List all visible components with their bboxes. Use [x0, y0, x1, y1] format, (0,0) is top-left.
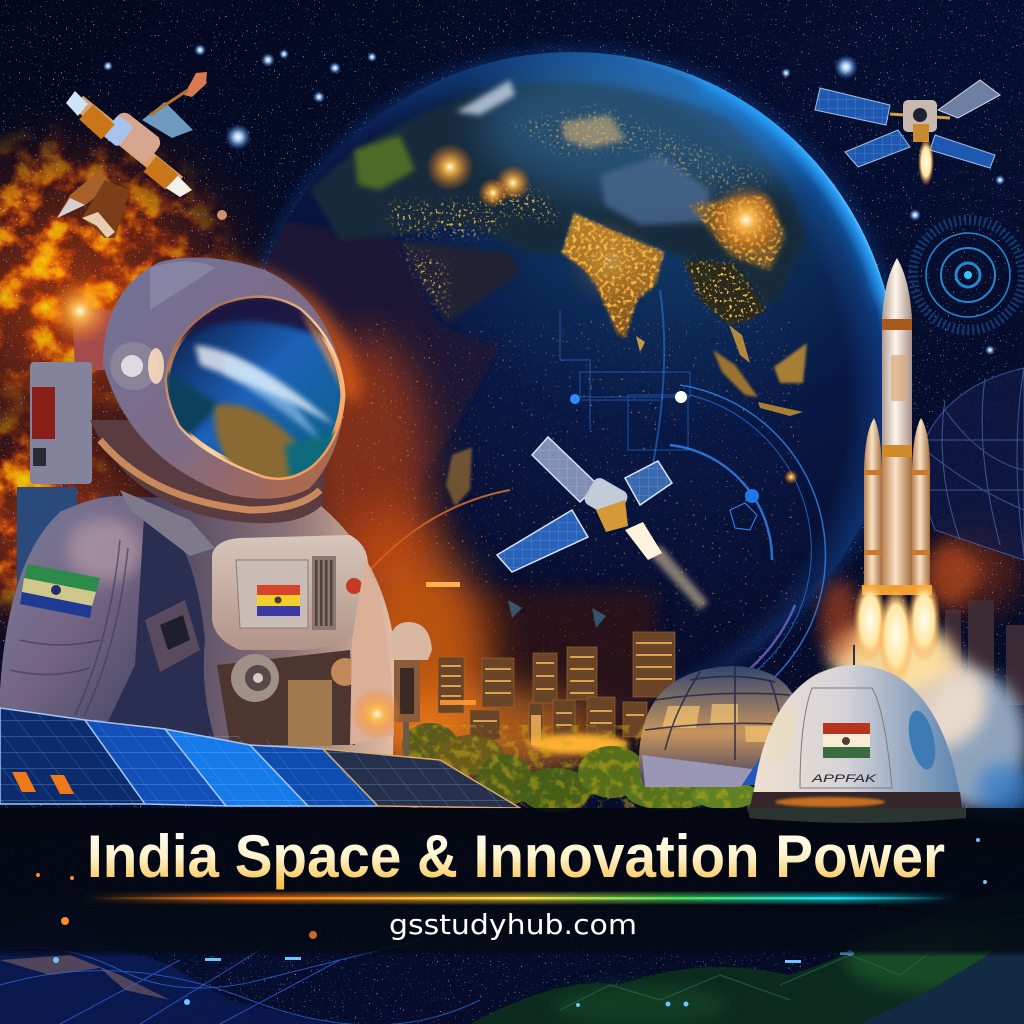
astronaut [0, 258, 432, 756]
satellite: top left orange [57, 72, 207, 238]
atmosphere haze [326, 52, 886, 681]
greenery [402, 723, 759, 812]
continent: india [562, 213, 664, 338]
helmet [103, 258, 345, 499]
capsule lettering: APPFAK [810, 773, 877, 785]
banner sparks [36, 838, 987, 939]
fire glow on earth near helmet [300, 335, 430, 605]
sun flare on helmet [46, 277, 114, 345]
shoulder flag patch [20, 564, 100, 618]
africa dark landmass [265, 222, 499, 518]
glowing divider [80, 894, 960, 902]
solar panel array [0, 708, 520, 808]
radar icon [913, 220, 1023, 330]
glint [351, 688, 403, 740]
capsule base [747, 808, 966, 823]
chest emblem [346, 578, 362, 594]
helmet glow [220, 270, 352, 400]
dark harness [105, 500, 215, 740]
landmass tints [354, 80, 785, 323]
earth globe [240, 48, 901, 720]
upper haze over asia [480, 50, 820, 200]
nebula: orange fire cloud [0, 0, 1024, 760]
arm highlight [67, 518, 143, 582]
website url: gsstudyhub.com [389, 908, 637, 941]
tech nodes [508, 391, 798, 628]
rocket exhaust smoke [820, 543, 1024, 816]
satellite: center [497, 437, 708, 610]
tech orbit rings [370, 290, 825, 690]
wire globe right [922, 368, 1024, 560]
visor [164, 295, 346, 480]
faint city speckles in southern hemisphere [340, 320, 800, 660]
continents: southeast asia and islands [636, 195, 807, 416]
satellite: top right with solar wings [815, 80, 1000, 186]
bottom terrain [0, 890, 1024, 1024]
suit torso [100, 495, 395, 755]
neck ring [90, 420, 325, 523]
bright cyan limb [700, 78, 888, 300]
suit arm [0, 496, 173, 728]
chest flag [257, 585, 300, 616]
title: India Space & Innovation Power [87, 823, 945, 890]
chest machinery [217, 650, 359, 746]
instrument tower [387, 622, 432, 756]
title banner backdrop [0, 808, 1024, 956]
lit right arm [350, 560, 394, 745]
crew capsule [750, 645, 962, 808]
arabia and asia lights [385, 105, 775, 318]
city skyline [345, 505, 1024, 780]
island: madagascar [446, 447, 472, 506]
asia and europe landmass [310, 82, 805, 305]
chest plate [212, 535, 368, 650]
dome habitat [639, 666, 798, 787]
flag on capsule [823, 723, 870, 758]
arm seams [10, 540, 128, 716]
rocket flames [853, 578, 941, 685]
city lights glow [426, 143, 782, 308]
backpack [17, 310, 125, 597]
rocket [862, 258, 932, 595]
dome lit windows [662, 704, 782, 742]
